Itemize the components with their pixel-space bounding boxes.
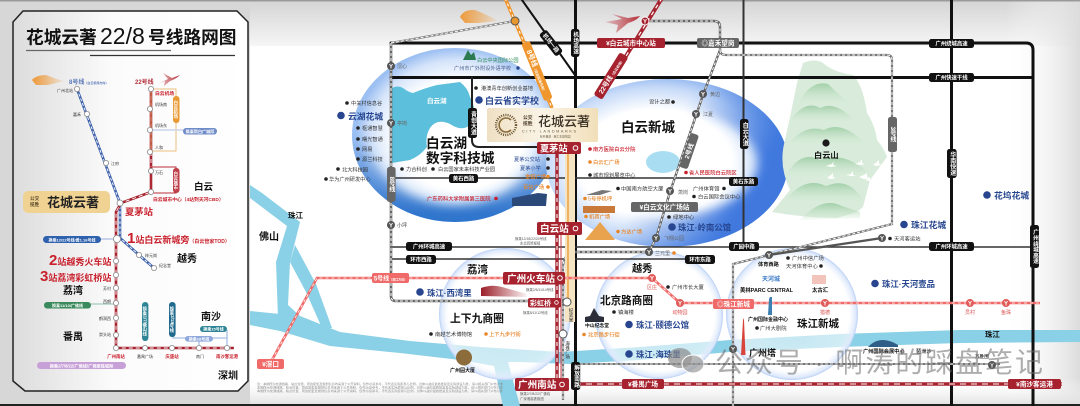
station names in panel: 南沙客运港 <box>216 353 239 360</box>
hospital, retail and amenity labels: 镇海楼 <box>618 308 635 316</box>
station names in panel: 江府 <box>111 160 119 166</box>
label: 2号线 rotated: 2号线 <box>683 142 696 160</box>
transfer pill: 1号线 vertical: 换乘1/7/佛山线 <box>142 306 148 337</box>
hospital, retail and amenity labels: 金铂广场 <box>525 172 547 180</box>
station names in panel: 庆盛站 <box>165 353 179 360</box>
project logo card: 花城云著: CITY LANDMARKS <box>522 130 578 134</box>
projects: blue labels with icons: 珠江·岭南公馆 <box>678 222 731 232</box>
station names in panel <box>57 87 239 360</box>
transfer notes under stations <box>515 236 554 401</box>
metro line 5 (coral) <box>272 278 1040 360</box>
horizontal road tags: 广州环城高速 <box>413 242 446 250</box>
orange dot by 兰元里 <box>672 251 676 255</box>
district headings on map: 白云山 <box>814 150 839 160</box>
district label: 白云 <box>194 181 214 193</box>
grey metro station markers: Y <box>880 236 884 242</box>
hospital, retail and amenity labels: 广州大剧院 <box>760 324 787 332</box>
icon: red airplane on map <box>605 14 640 33</box>
watermark: WeChat icon <box>668 348 704 373</box>
metro station names on map: 区庄 <box>647 284 657 291</box>
vertical road and line tags: 华南快速 <box>949 151 956 177</box>
district labels in panel: 南沙 <box>201 310 221 323</box>
vertical road and line tags: 3号线 <box>889 127 896 143</box>
transfer pill: 1号线 vertical <box>142 302 148 341</box>
district labels in panel: 深圳 <box>218 370 238 382</box>
water: Pearl River <box>250 185 1080 406</box>
district headings on map: 珠江新城 <box>797 317 839 330</box>
icon: orange train on map <box>460 10 498 23</box>
station names in panel: 嘉禾 <box>73 111 81 117</box>
hospital, retail and amenity labels: 广州体育馆 <box>693 184 720 192</box>
station names in panel: 机场南 <box>155 101 167 107</box>
grey metro station markers: Y <box>389 223 393 229</box>
line pills on the network: ¥番禺广场 <box>628 380 658 388</box>
station tags: 彩虹桥 <box>530 299 551 308</box>
grey metro station markers: Y <box>694 112 698 118</box>
project logo card: 花城云著 <box>487 108 598 142</box>
line 22 label: 22号线 <box>135 78 154 86</box>
transfer pill: 18号线: 换乘18号线 <box>189 335 209 341</box>
disclaimer fine print: 注：本图所示交通线路、站点位置、周边配套及规划信息均来源于公开资料，仅作示意参考，不代表实际距离与比例，具体以政府最终批复及实际建设为准，请以相关部门公布为准 <box>257 382 503 386</box>
hospital, retail and amenity labels: 百信广场 <box>523 183 545 191</box>
text block: 白云湖 zone labels: 网易 <box>362 146 372 153</box>
metro station names on map: 员村 <box>965 309 975 316</box>
red metro station markers <box>648 274 1010 307</box>
station tags: 广州火车站 <box>507 273 555 285</box>
city centre box and pill <box>151 167 180 193</box>
station names in panel: 人和 <box>155 144 163 150</box>
hospital, retail and amenity labels: 5号停机坪 <box>588 194 613 202</box>
horizontal road tags: 广州绕城高速 <box>935 40 968 48</box>
panel title: 花城云著 <box>26 26 97 48</box>
transfer notes under stations: 换乘2/5/11/14号线 <box>526 287 554 292</box>
station names in panel: 白云机场 <box>155 90 174 97</box>
horizontal road tags: 广州环城高速 <box>935 242 968 250</box>
icon: teal building <box>512 193 547 206</box>
watermark: account name: 公众号 · 啊涛的踩盘笔记 <box>715 347 1043 378</box>
line pills on the network: ¥滘口 <box>262 360 279 368</box>
line 22 route <box>116 89 234 348</box>
metro station names on map: 海珠广场 <box>565 340 570 361</box>
transfer pill: 广州南站 <box>37 362 126 369</box>
metro station names on map: 黄边 <box>710 91 720 98</box>
projects: blue labels with icons: 珠江·西湾里 <box>427 288 472 298</box>
disclaimer fine print: 本图所示交通线路、站点位置、周边配套及规划信息均来源于公开资料，仅作示意参考，不代表实际距离与比例，具体以政府最终批复及实际建设为准，请以相关部门公布为准 <box>257 389 504 393</box>
area circle: 北京路 <box>595 251 723 379</box>
metro station names on map: 飞翔公园 <box>664 235 684 242</box>
transfer pill: 2/18 vertical <box>169 302 176 337</box>
dots for 白云湖 labels <box>324 66 550 181</box>
projects: blue labels with icons: 珠江·颐德公馆 <box>636 320 689 330</box>
district headings on map: 北京路商圈 <box>600 294 653 307</box>
heading: 白云湖数字科技城: 白云湖 <box>426 135 467 151</box>
icon: orange building <box>583 206 615 213</box>
disclaimer fine print: 本图所示交通线路、站点位置、周边配套及规划信息均来源于公开资料，仅作示意参考，不代表实际距离与比例，具体以政府最终批复及实际建设为准，请以相关部门公布为准 <box>257 386 504 390</box>
district headings on map: 太古汇 <box>812 286 829 294</box>
projects: blue labels with icons: 白云省实学校 <box>485 95 539 106</box>
grey metro station markers: Y <box>701 92 705 98</box>
metro station names on map: 江夏 <box>703 111 713 118</box>
lake: 白云湖 <box>392 82 474 163</box>
airport shuttle box and pill <box>151 89 180 151</box>
projects: blue labels with icons <box>337 95 1029 360</box>
horizontal road tags: 广园中路 <box>733 242 755 250</box>
project logo card: 花城云著: 揽胜 <box>523 120 533 127</box>
station names in panel: 梓元岗 <box>145 252 157 258</box>
grey metro station markers: Y <box>731 347 735 353</box>
text block: 白云湖 zone labels: 白云中央国际公园 <box>477 56 519 64</box>
hospital, retail and amenity labels: 天河客运站 <box>894 234 921 242</box>
projects: blue labels with icons: 珠江·海珠里 <box>636 350 681 360</box>
district headings on map: 广州塔 <box>749 347 776 358</box>
label: 机场一路 rotated: 机场一路 <box>541 32 561 55</box>
project logo card: 花城云著: 公交 <box>523 114 533 121</box>
vertical road and line tags: 青创大道 <box>470 110 476 136</box>
grey metro station markers: Y <box>668 189 672 195</box>
transfer pill: 新白广城际: 换乘新白广城际 <box>186 128 214 134</box>
text block: 白云湖 zone labels: 华为广州研发中心 <box>329 175 371 183</box>
horizontal road tags: 黄石西路 <box>453 174 475 182</box>
hospital, retail and amenity labels: 广东药科大学附属第三医院 <box>427 194 491 202</box>
label: 8号线 rotated <box>521 40 553 101</box>
hospital, retail and amenity labels: 白云国际会议中心 <box>698 192 741 200</box>
metro line 8 north extension (orange) <box>505 0 575 322</box>
transfer notes under stations: 广深港高铁枢纽 <box>520 396 544 401</box>
hospital, retail and amenity labels: 白云汇广场 <box>593 158 620 166</box>
text block: 白云湖 zone labels: 中关村信息谷 <box>351 99 383 107</box>
small lake in 白云新城 <box>646 151 680 173</box>
transfer pill: 18号线 <box>172 330 227 348</box>
station names in panel: 番禺广场 <box>137 353 153 359</box>
disclaimer fine print <box>257 382 504 393</box>
heading: 白云新城: 白云新城 <box>621 119 675 135</box>
horizontal road tags: 广州快速干线 <box>935 74 968 82</box>
hospital, retail and amenity labels: 南越艺术博物馆 <box>435 330 472 338</box>
text block: 白云湖 zone labels: 源兰科技 <box>362 155 383 163</box>
hospital, retail and amenity labels: 中国南方航空大厦 <box>621 184 664 192</box>
district headings on map: 广州圆大厦 <box>450 367 475 374</box>
highlight: 2站越秀火车站: 2站越秀火车站 <box>49 252 111 269</box>
panel title: 号线路网图 <box>148 28 236 48</box>
station names in panel: 崇头站 <box>99 331 111 337</box>
text block: 白云湖 zone labels: 夏茅小学 <box>520 164 541 172</box>
line pills on the network: ◎珠江新城 <box>717 300 750 308</box>
transfer pill: 12/22号线: 换乘12/22号线/黄1.16号线 <box>49 236 95 242</box>
district headings on map: 体育西路 <box>758 260 780 268</box>
district labels in panel: 番禺 <box>63 331 83 343</box>
text block: 白云湖 zone labels: 曙光智通 <box>362 135 384 143</box>
hospital, retail and amenity labels: 广州中信广场 <box>792 254 824 262</box>
red metro station markers: Y <box>650 276 654 282</box>
callout: 花城云著 location: 花城云著 <box>47 195 99 210</box>
projects: blue labels with icons: 花坞花城 <box>994 190 1029 200</box>
hospital, retail and amenity labels: 广州市长大厦 <box>672 283 704 291</box>
line pills on the network: ¥白云文化广场站 <box>640 202 690 212</box>
label: 22号线 rotated: 22号线（白云机场） <box>596 56 625 95</box>
district headings on map: 广州国际会展中心 <box>863 347 905 355</box>
icon: exhibition centre <box>868 340 898 347</box>
hospital, retail and amenity labels: 设计之都 <box>649 98 671 106</box>
station markers in panel <box>74 86 230 351</box>
icon: 白云山 marker <box>822 139 830 147</box>
vertical road and line tags <box>387 29 1039 390</box>
vertical road and line tags: 8号线 <box>388 177 395 193</box>
horizontal road tags <box>406 39 974 264</box>
grey metro station markers: Y <box>389 64 393 70</box>
line pills on the network: ¥南沙客运港 <box>1016 380 1053 388</box>
metro station names on map: 萧岗 <box>678 189 688 196</box>
mountain: 白云山 <box>772 60 887 220</box>
metro station names on map: 滘心 <box>397 63 407 70</box>
transfer notes under stations: 换乘2/7/8/22/广佛线 <box>520 391 551 396</box>
label: 22号线 rotated <box>594 52 628 100</box>
transfer notes under stations: 换乘12/18/22/20号线 <box>515 236 547 241</box>
icon: 天河城 logo: 天河城 <box>762 275 780 283</box>
station tags: 广州南站 <box>518 379 557 391</box>
hospital, retail and amenity labels: 城市规划展览中心 <box>593 171 636 179</box>
icon: temple <box>585 222 615 240</box>
text block: 白云湖 zone labels <box>329 56 541 183</box>
district headings on map: 珠江 <box>985 330 1000 339</box>
project logo card: 花城云著: 标杆典范 · 西工主题花园 <box>540 134 571 138</box>
station tags: 白云站 <box>540 223 569 235</box>
line 8 label: 8号线（白云机场方向） <box>69 78 108 86</box>
line pills on the network: ¥白云城市中心站 <box>606 38 656 48</box>
road: black expressway network <box>391 0 1033 406</box>
district headings on map: 珠江 <box>288 210 303 220</box>
city centre box and pill: 白云城市 <box>173 170 179 191</box>
transfer pill: 11/广佛线 <box>44 302 116 308</box>
district headings on map: 越秀 <box>632 262 652 275</box>
district headings on map: 上下九商圈 <box>450 311 504 325</box>
metro station names on map <box>397 63 1011 361</box>
metro line 2/3 (grey dashed) <box>563 21 1000 406</box>
panel title: 22/8 <box>100 23 145 49</box>
text block: 白云湖 zone labels: 力合科创 <box>406 165 427 173</box>
horizontal road tags: 环市西路 <box>410 256 432 264</box>
hospital, retail and amenity labels: 天河体育中心 <box>786 262 818 270</box>
icon: red airplane <box>157 73 180 86</box>
project logo card: 花城云著: 花城云著 <box>538 114 590 129</box>
station names in panel: 南门 <box>196 353 204 359</box>
panel: 22/8 line route map <box>13 11 248 391</box>
line 8 route <box>77 89 154 268</box>
icon: 太古汇 logo <box>812 275 826 284</box>
transfer notes under stations: 东北商贸枢纽 <box>520 240 541 246</box>
area circle: 白云湖 digital city <box>352 48 558 222</box>
district headings on map: 中山纪念堂 <box>585 322 609 329</box>
station names in panel: 广州北站 <box>57 87 73 93</box>
vertical road and line tags: 白云大道 <box>741 121 748 147</box>
projects: blue labels with icons: 珠江·天河壹品 <box>882 279 935 289</box>
hospital, retail and amenity labels: 上下九步行街 <box>489 330 521 338</box>
red metro station markers: Y <box>1004 301 1008 307</box>
transfer pill: 2/18 vertical: 换乘2/18号线 <box>169 305 175 333</box>
line pills on the network: ◎嘉禾望岗 <box>702 38 734 48</box>
district labels in panel: 荔湾 <box>63 284 83 297</box>
label: 8号线 rotated: 8号线 （白云机场方向） <box>525 48 550 93</box>
grey metro station markers <box>387 17 996 369</box>
district headings on map: 万胜围 <box>975 353 989 360</box>
grey metro station markers: Y <box>654 236 658 242</box>
grey metro station markers: Y <box>647 250 651 256</box>
metro station names on map: 兰元里 <box>655 250 670 257</box>
grey metro station markers: Y <box>389 121 393 127</box>
icon: 广州圆 <box>456 350 472 366</box>
area circle: 白云新城 <box>546 79 788 247</box>
callout: 花城云著 location <box>23 191 110 213</box>
transfer pill: 15号线 <box>200 326 227 332</box>
metro station names on map: 猎德 <box>820 309 830 316</box>
callout: 花城云著 location: 揽胜 <box>30 201 40 208</box>
projects: blue labels with icons: 珠江花城 <box>911 219 946 230</box>
transfer pill: 15号线: 换乘15号线 <box>203 326 224 332</box>
label: 机场一路 rotated <box>539 29 563 57</box>
area circle: 珠江新城 <box>726 248 858 380</box>
district headings on map: 琶洲沙 <box>916 348 932 355</box>
transfer pill: 11/广佛线: 换乘11/10/广佛线 <box>52 302 83 308</box>
panel title <box>26 23 236 49</box>
district labels in panel <box>63 252 238 382</box>
district headings on map: 广州国际金融中心 <box>748 316 788 323</box>
line pills on the network <box>257 38 1061 389</box>
grey metro station markers: Y <box>767 253 771 259</box>
vertical road and line tags: 解放南路 <box>573 364 580 389</box>
icon: 中山纪念堂 <box>585 308 604 322</box>
highlight: 3站荔湾彩虹桥站: 3站荔湾彩虹桥站 <box>40 268 111 285</box>
hospital, retail and amenity labels: 机荷广场 <box>589 212 611 220</box>
red metro station markers: Y <box>678 301 682 307</box>
title underlines <box>26 50 235 56</box>
area circle: 上下九 <box>439 248 571 380</box>
metro station names on map: 小坪 <box>397 222 407 229</box>
red metro station markers: Y <box>823 301 827 307</box>
grey metro station markers: Y <box>643 19 647 25</box>
district labels in panel: 越秀 <box>177 252 197 265</box>
airport shuttle box and pill: 白云机场 <box>173 99 179 120</box>
icon: sunburst logo <box>496 115 516 135</box>
transfer pill: 12/22号线 <box>43 236 117 243</box>
transfer notes under stations: 换乘8/11/12号线 <box>523 310 548 315</box>
district headings on map: 荔湾 <box>467 263 488 276</box>
text block: 白云湖 zone labels: 北大科技园 <box>342 166 368 174</box>
station names in panel: 芳村 <box>103 285 111 291</box>
icon: IFC tower <box>768 297 772 315</box>
projects: blue labels with icons: 云湖花城 <box>348 110 383 122</box>
red metro station markers: Y <box>968 301 972 307</box>
metro line 22 (dark red) <box>557 0 1062 385</box>
heading: 白云湖数字科技城: 数字科技城 <box>426 150 495 166</box>
text block: 白云湖 zone labels: 广州市广外附设外语学校 <box>454 64 511 72</box>
station tags <box>503 142 582 391</box>
vertical road and line tags: 广州绕城高速 <box>1032 228 1038 265</box>
highlight: 1站白云新城旁: 1站白云新城旁（白云管家TOD） <box>127 230 230 247</box>
station tags: 夏茅站 <box>540 142 568 154</box>
hospital, retail and amenity labels: 省人民医院白云院区 <box>689 168 737 176</box>
metro line 8 (grey dashed) <box>391 21 560 301</box>
district headings on map <box>259 150 1000 374</box>
hospital, retail and amenity labels: 方达广场 <box>621 228 643 236</box>
station names in panel: 鹤洞西 <box>99 315 111 321</box>
station: 夏茅站: 夏茅站 <box>125 206 153 217</box>
birds over the mountain <box>826 159 882 187</box>
station names in panel: 纪念堂 <box>159 262 171 268</box>
station names in panel: 机场东 <box>155 122 167 128</box>
label: 白云湖 lake: 白云湖 <box>427 96 447 105</box>
station names in panel: 广州南站 <box>107 353 125 360</box>
icon: 南航 building <box>586 190 612 195</box>
station caption: 白云城市中心（4站到天河CBD） <box>153 196 224 203</box>
text block: 白云湖 zone labels: 港澳青年创新创业基地 <box>481 84 533 92</box>
vertical road and line tags: 机场高速 <box>572 31 579 56</box>
icon: Canton Tower <box>741 318 746 355</box>
metro station names on map: 纪念堂 <box>568 307 574 322</box>
hospital, retail and amenity labels: 南方医院白云分院 <box>593 145 636 153</box>
text block: 白云湖 zone labels: 夏茅公交站 <box>514 155 540 163</box>
hospital, retail and amenity labels <box>427 98 921 338</box>
icon: train by 西湾里 <box>481 286 527 297</box>
label: 2号线 rotated <box>679 133 699 169</box>
icon: white-cloud central park tree <box>463 50 476 60</box>
grey metro station markers: Y <box>990 363 994 369</box>
horizontal road tags: 环市东路 <box>689 256 711 264</box>
hospital, retail and amenity labels: 北京路步行街 <box>588 330 620 338</box>
horizontal road tags: 黄石东路 <box>733 178 755 186</box>
icon: orange high-speed train <box>32 75 64 85</box>
metro station names on map: 动物园 <box>672 309 688 316</box>
hospital, retail and amenity labels: 绿地中心 <box>673 213 695 221</box>
station names in panel: 西朗 <box>103 298 111 304</box>
district headings on map: 佛山 <box>259 230 279 243</box>
transfer pill: 广州南站: 换乘2/7/8/22/广佛线/广佛南珠城际 <box>50 362 114 369</box>
station names in panel: 万石 <box>155 170 163 175</box>
transfer pill: 新白广城际 <box>151 128 217 134</box>
callout: 花城云著 location: 公交 <box>30 195 40 202</box>
text block: 白云湖 zone labels: 枢通智慧 <box>362 124 383 132</box>
line pills on the network: 5号线（滘口方向） <box>374 274 407 282</box>
text block: 白云湖 zone labels: 白云国家未来科技产业园 <box>438 165 495 173</box>
district headings on map: 美林PARC CENTRAL <box>740 286 794 294</box>
metro station names on map: 亭岗 <box>397 120 407 127</box>
metro station names on map: 鱼珠 <box>1001 309 1011 316</box>
